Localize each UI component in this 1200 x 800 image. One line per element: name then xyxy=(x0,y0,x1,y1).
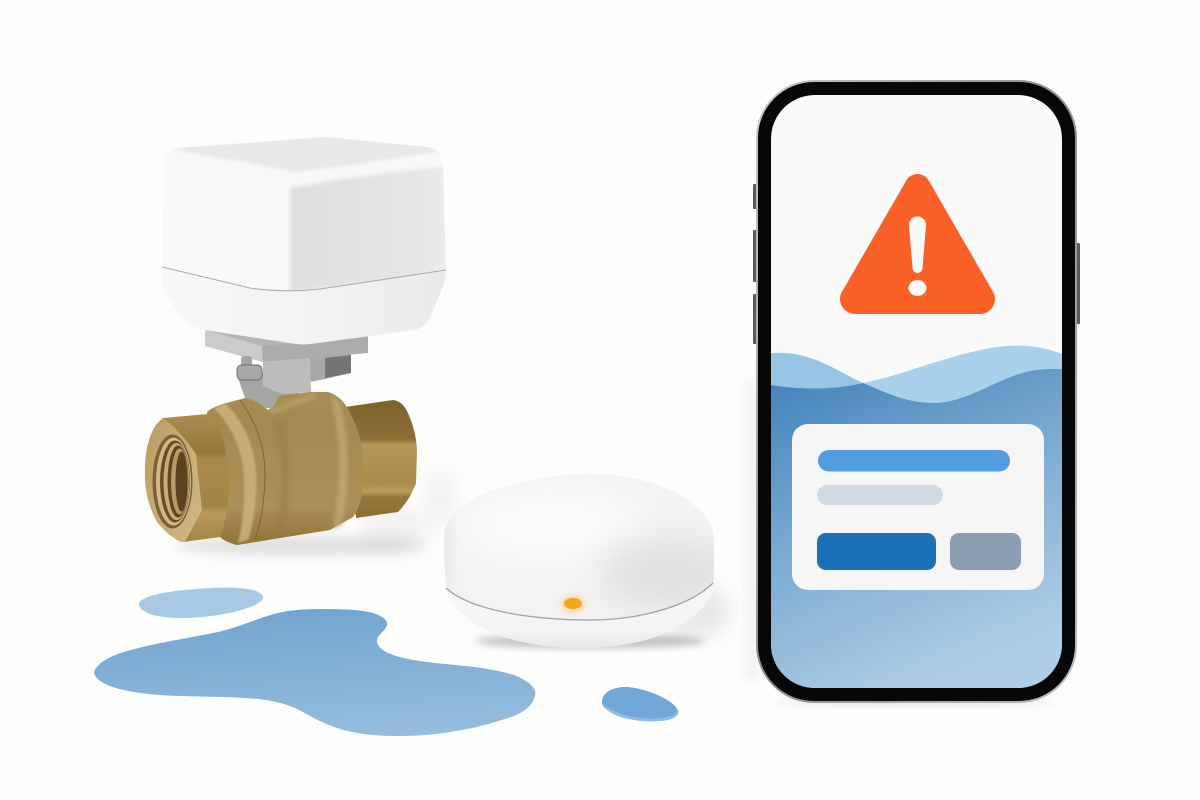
side buttons xyxy=(753,184,1080,344)
warning triangle xyxy=(840,174,995,314)
mounting bracket xyxy=(205,330,368,408)
hub lower band xyxy=(536,584,713,648)
LED indicator xyxy=(561,595,585,613)
skirt xyxy=(206,272,446,344)
water puddle: small upper xyxy=(139,588,263,618)
water wave back right xyxy=(863,346,1062,403)
water puddle: small drop xyxy=(602,687,678,721)
smart valve xyxy=(145,130,460,545)
actuator housing xyxy=(162,137,446,344)
alert message bar xyxy=(817,485,943,505)
water body xyxy=(771,369,1062,688)
exclamation mark xyxy=(909,216,926,273)
top face xyxy=(174,137,438,172)
soft shadows xyxy=(175,380,1055,705)
right face xyxy=(290,165,460,292)
phone screen xyxy=(771,95,1062,688)
hub body xyxy=(444,474,714,648)
secondary button xyxy=(950,533,1021,570)
alert title bar xyxy=(818,450,1010,472)
alert card xyxy=(792,424,1044,590)
bevel highlight xyxy=(168,152,440,188)
brass left nut xyxy=(163,414,229,542)
seam xyxy=(162,267,446,291)
phone frame xyxy=(756,80,1077,703)
water wave back left xyxy=(771,352,863,388)
smartphone xyxy=(753,80,1080,703)
brass central body xyxy=(207,392,363,545)
valve inlet with thread xyxy=(145,418,202,542)
brass right nut xyxy=(345,400,417,518)
water puddle: large xyxy=(94,609,535,736)
leak sensor hub xyxy=(444,474,714,648)
hub seam xyxy=(446,583,713,620)
primary button xyxy=(817,533,936,570)
